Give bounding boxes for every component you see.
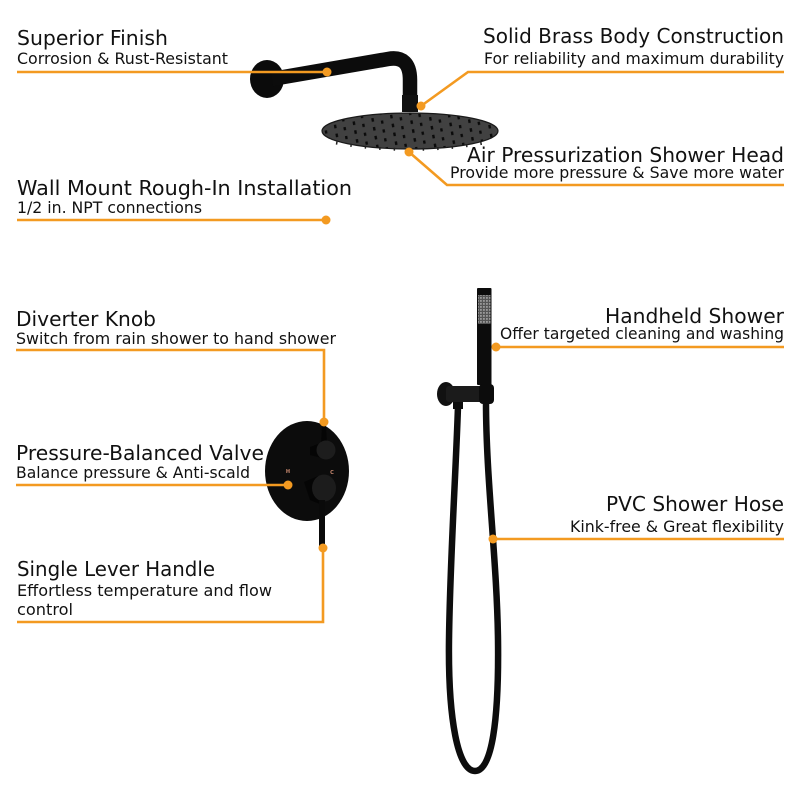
- description: Corrosion & Rust-Resistant: [17, 49, 228, 68]
- dot: [284, 480, 292, 490]
- callout: diverter knob: [16, 307, 336, 426]
- description: Switch from rain shower to hand shower: [16, 329, 336, 348]
- diverter knob: [310, 425, 336, 460]
- leader line: [17, 219, 326, 221]
- wall holder: [437, 382, 494, 409]
- heading: Air Pressurization Shower Head: [467, 143, 784, 167]
- rain shower head: [322, 113, 498, 150]
- leader line: [17, 548, 323, 622]
- description: Effortless temperature and flow: [17, 581, 272, 600]
- product: rain shower arm and head: [250, 58, 498, 150]
- leader line: [17, 71, 327, 73]
- description: Kink-free & Great flexibility: [570, 517, 784, 536]
- heading: Superior Finish: [17, 26, 168, 50]
- hose: [449, 402, 498, 771]
- hot and cold markers: [286, 469, 334, 476]
- heading: Wall Mount Rough-In Installation: [17, 176, 352, 200]
- dot: [404, 148, 414, 156]
- handheld shower wand: [477, 288, 492, 385]
- callout: pvc shower hose: [488, 492, 784, 544]
- dot: [416, 102, 426, 110]
- heading: Solid Brass Body Construction: [483, 24, 784, 48]
- hot and cold markers: C: [330, 470, 334, 476]
- leader line: [16, 350, 324, 422]
- callout: wall mount: [17, 176, 352, 224]
- description: Provide more pressure & Save more water: [450, 163, 785, 182]
- callout: superior finish: [17, 26, 332, 76]
- product: handheld shower and hose: [437, 288, 498, 771]
- description: Balance pressure & Anti-scald: [16, 463, 250, 482]
- description: For reliability and maximum durability: [484, 49, 784, 68]
- collar: [402, 95, 418, 112]
- leader line: [16, 484, 288, 486]
- leader line: [496, 346, 784, 348]
- heading: Handheld Shower: [605, 304, 785, 328]
- dot: [320, 418, 328, 426]
- heading: PVC Shower Hose: [606, 492, 784, 516]
- leader line: [493, 538, 784, 540]
- description: 1/2 in. NPT connections: [17, 198, 202, 217]
- heading: Single Lever Handle: [17, 557, 215, 581]
- description continued: control: [17, 600, 73, 619]
- dot: [488, 534, 498, 544]
- hot and cold markers: H: [286, 469, 290, 475]
- dot: [322, 68, 332, 76]
- callout: air pressurization: [404, 143, 785, 185]
- callout: solid brass body: [416, 24, 784, 110]
- callout: single lever handle: [17, 544, 328, 622]
- dot: [322, 216, 330, 224]
- wall plate: [250, 60, 284, 98]
- shower arm: [272, 58, 410, 104]
- valve trim plate: [265, 421, 349, 521]
- description: Offer targeted cleaning and washing: [500, 324, 784, 343]
- dot: [492, 342, 500, 352]
- callout: handheld shower: [492, 304, 785, 352]
- heading: Diverter Knob: [16, 307, 156, 331]
- heading: Pressure-Balanced Valve: [16, 441, 264, 465]
- lever handle: [304, 474, 336, 548]
- callout: pressure-balanced valve: [16, 441, 292, 490]
- leader line: [421, 72, 784, 106]
- product: diverter valve: [265, 421, 349, 548]
- dot: [318, 544, 328, 552]
- leader line: [409, 152, 784, 185]
